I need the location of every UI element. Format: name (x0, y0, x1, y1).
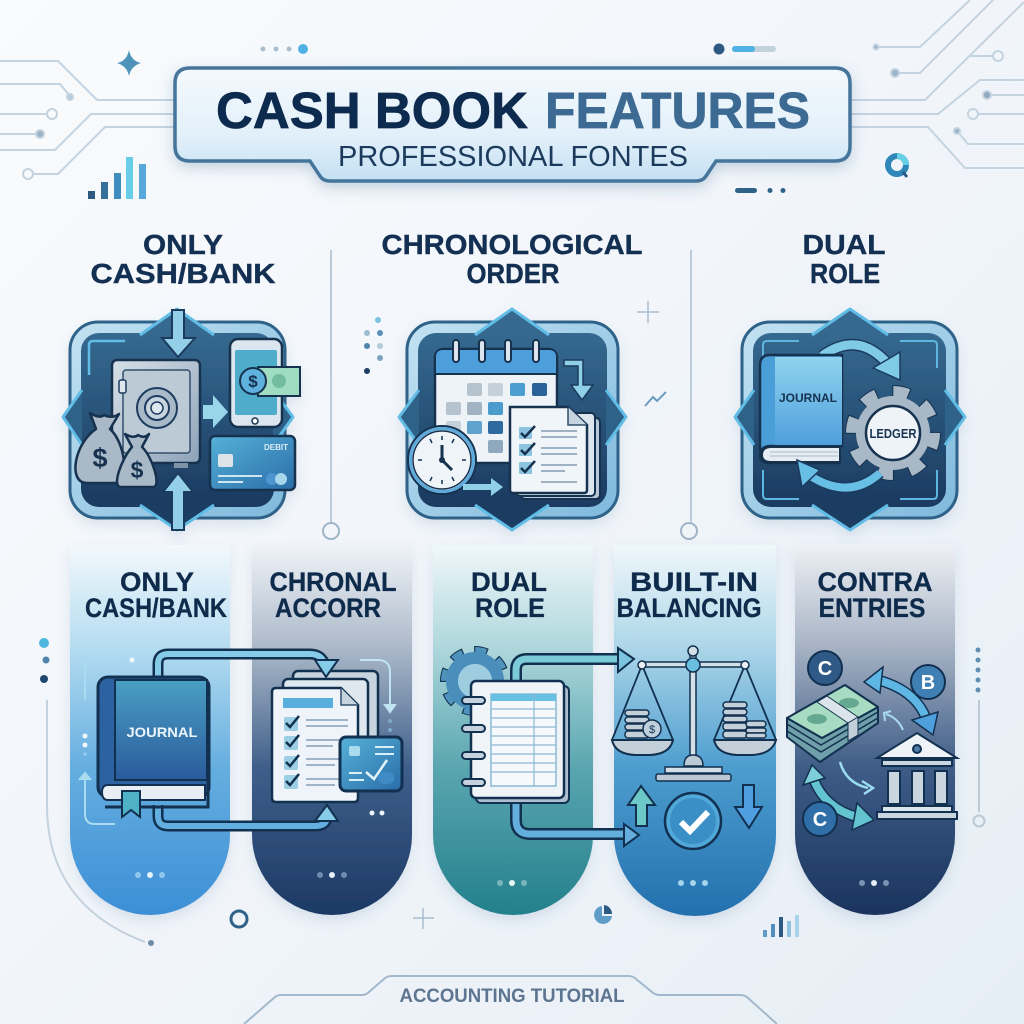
icon card: dual role (735, 309, 965, 530)
icon card: only cash/bank (63, 309, 300, 530)
icon: coin B: B (921, 672, 935, 694)
icon: debit card: DEBIT (264, 443, 288, 452)
footer text: ACCOUNTING TUTORIAL (400, 986, 625, 1007)
pagination dots 3 (497, 880, 527, 886)
arrow: notebook to scale (516, 648, 634, 684)
thin arrow right (360, 660, 395, 712)
icon: small arc arrow top (884, 711, 903, 730)
pill label 2: ACCORR (275, 593, 381, 623)
heading: dual role (802, 229, 886, 289)
label: ledger: LEDGER (870, 426, 917, 441)
pill label 5: CONTRA (818, 567, 932, 597)
icon: notebook table (462, 681, 569, 803)
pill label 5 (818, 567, 932, 623)
title text: CASH BOOK (216, 82, 528, 139)
icon: calendar (435, 340, 557, 463)
icon: curved arrow (564, 360, 593, 400)
arrow: journal top connector (158, 654, 338, 680)
pill label 3 (471, 567, 547, 623)
icon: balance scale: $ (649, 724, 655, 736)
pie icon (594, 905, 612, 924)
heading: dual role: ROLE (810, 258, 880, 289)
small dot (148, 940, 154, 946)
icon: right arrow (203, 395, 228, 428)
icon: clock (408, 426, 476, 494)
icon: small arc arrow bottom (840, 762, 873, 794)
pill label 2 (270, 567, 396, 623)
circuit lines left (0, 61, 175, 179)
progress indicator top right (714, 44, 776, 54)
dots top left (260, 44, 308, 54)
icon: checklist document (272, 671, 378, 802)
pill label 1 (85, 567, 227, 623)
pill label 1: CASH/BANK (85, 593, 227, 623)
heading: only cash/bank (90, 229, 276, 289)
heading: only cash/bank: CASH/BANK (90, 258, 276, 289)
icon: check badge (665, 793, 721, 849)
dash and dots (735, 188, 786, 193)
pill label 3: DUAL (471, 567, 547, 597)
icon: phone with money (230, 339, 300, 427)
icon: down arrow blue (735, 785, 762, 828)
heading: only cash/bank: ONLY (143, 229, 223, 260)
icon: bank (877, 733, 957, 819)
pagination dots 5 (859, 880, 889, 886)
plus sign (637, 301, 659, 323)
label: journal: JOURNAL (126, 724, 198, 740)
icon: top cycle arrow (822, 345, 900, 380)
plus bottom (413, 908, 434, 929)
curved line bottom left (47, 700, 145, 942)
icon: gear behind notebook (447, 653, 503, 709)
heading: chronological order (382, 229, 642, 289)
title highlight: FEATURES (545, 82, 810, 139)
pill label 4 (616, 567, 762, 623)
circuit lines right (850, 0, 1024, 168)
dots cluster (364, 317, 383, 374)
heading: dual role: DUAL (802, 229, 886, 260)
title plaque (175, 68, 850, 181)
bars bottom right (763, 915, 799, 937)
arrow: journal bottom connector (158, 805, 338, 826)
label: journal: JOURNAL (779, 391, 837, 405)
icon: journal book (760, 355, 842, 463)
pill label 1: ONLY (120, 567, 194, 597)
icon: debit card (210, 436, 295, 490)
pill label 2: CHRONAL (270, 567, 396, 597)
icon: right arrow (463, 478, 503, 496)
footer frame (244, 976, 777, 1024)
pill: contra entries (795, 545, 955, 915)
icon: coin C top: C (818, 658, 832, 680)
vertical line and ring right (974, 700, 984, 826)
dots right of document (370, 719, 392, 816)
pagination dots 1 (135, 872, 165, 878)
icon: coin C top (808, 651, 842, 685)
icon: bookmark (122, 791, 140, 817)
icon: checked card (340, 737, 402, 791)
left dots (39, 638, 50, 683)
icon: ledger gear (852, 392, 934, 474)
icon: down arrow (162, 310, 195, 357)
icon: document stack (510, 407, 600, 499)
heading: chronological order: CHRONOLOGICAL (382, 229, 642, 260)
pill label 3: ROLE (475, 593, 545, 623)
icon: journal book large (98, 677, 209, 817)
icon: up arrow green (628, 786, 655, 826)
icon: phone with money: $ (248, 372, 258, 391)
icon: safe (112, 360, 200, 468)
ring bottom (231, 911, 247, 927)
icon: coin B (911, 665, 945, 699)
icon: money bags: $ (131, 457, 144, 483)
icon: coin C bottom: C (813, 809, 827, 831)
icon: arrow cash to bank (864, 667, 938, 735)
icon: bottom cycle arrow (797, 460, 880, 488)
pill: dual role (433, 545, 593, 915)
icon: balance scale (612, 646, 776, 781)
pill: built-in balancing (614, 545, 776, 916)
zigzag mark (645, 392, 666, 406)
pill label 5: ENTRIES (818, 593, 926, 623)
arrow: notebook to balance check (516, 798, 639, 846)
divider right (681, 250, 697, 539)
heading: chronological order: ORDER (466, 258, 560, 289)
icon: up arrow (163, 473, 193, 530)
divider left (323, 250, 339, 539)
pill label 4: BALANCING (616, 593, 762, 623)
icon: coin C bottom (803, 802, 837, 836)
icon: cash stack (787, 685, 878, 762)
pill label 4: BUILT-IN (630, 567, 758, 597)
subtitle: PROFESSIONAL FONTES (338, 141, 688, 173)
thin bracket arrows left (79, 660, 122, 824)
donut icon (888, 156, 907, 177)
icon: sparkle (117, 50, 141, 76)
pagination dots 4 (678, 880, 708, 886)
pill: only cash/bank (70, 545, 230, 915)
pagination dots 2 (317, 872, 347, 878)
bar chart icon (88, 157, 146, 199)
pill: chronal accorr (252, 545, 412, 915)
icon: money bags (75, 413, 157, 487)
icon: arrow cash and coin (803, 765, 874, 830)
icon card: chronological order (399, 309, 626, 530)
dots left of journal (82, 658, 134, 756)
icon: money bags: $ (92, 443, 108, 473)
right dots (976, 648, 980, 692)
